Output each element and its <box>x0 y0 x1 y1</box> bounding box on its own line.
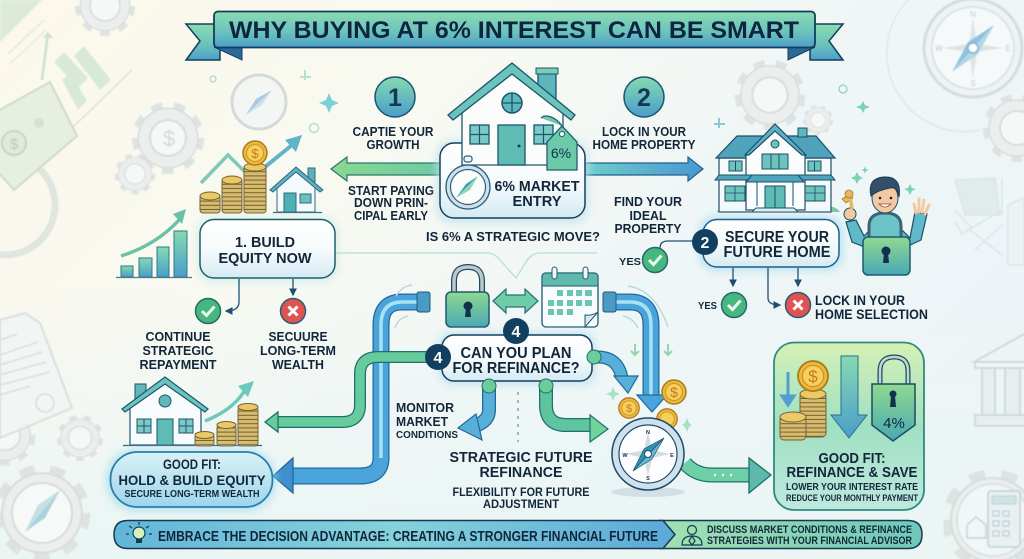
icon: cross right <box>786 292 810 318</box>
icon: light bulb <box>126 522 152 543</box>
panel: 1. build equity now <box>197 217 338 282</box>
icon: 4% padlock <box>872 357 915 441</box>
icon: gold coins near compass <box>606 380 692 432</box>
text: refinance headline <box>786 450 918 504</box>
background decor: top-left finance illustration <box>0 0 132 255</box>
icon: no cross left <box>280 298 306 324</box>
label: capture your growth <box>352 125 434 152</box>
step 1 badge <box>375 77 415 117</box>
label: start paying down principal: DOWN PRIN- <box>354 196 428 210</box>
icon: refinance coins <box>780 361 828 440</box>
label: capture your growth: CAPTIE YOUR <box>352 125 434 139</box>
icon: compass: W <box>622 453 628 459</box>
icon: stopwatch compass <box>446 156 490 209</box>
icon: double arrow <box>493 289 538 313</box>
label: find your ideal property: FIND YOUR <box>614 195 682 209</box>
label: monitor market conditions: CONDITIONS <box>396 429 458 441</box>
label: start paying down principal: START PAYING <box>348 184 434 198</box>
icon: compass <box>611 418 685 497</box>
label: monitor market conditions <box>396 401 458 441</box>
panel: can you plan for refinance: CAN YOU PLAN <box>460 345 572 362</box>
label: strategic future refinance <box>450 449 592 481</box>
badge: 4 left <box>425 344 451 370</box>
label: monitor market conditions: MONITOR <box>396 401 454 415</box>
panel: good fit hold & build equity: SECURE LONG-TERM WEALTH <box>124 489 260 500</box>
panel: secure your future home: SECURE YOUR <box>725 229 829 246</box>
icon: compass: S <box>646 476 650 482</box>
label: lock in your home property: LOCK IN YOUR <box>602 125 686 139</box>
connectors from secure <box>733 268 798 305</box>
icon: 6% price tag: 6% <box>551 145 571 161</box>
panel: good fit refinance & save <box>774 342 924 510</box>
arrow: refinance to coins <box>587 350 638 393</box>
label: find your ideal property: IDEAL <box>630 209 667 223</box>
step 2 badge: 2 <box>637 84 651 112</box>
arrow: monitor market conditions <box>458 379 496 440</box>
footer: advisor segment <box>660 520 922 548</box>
blue pipe down to hold and build equity <box>273 292 430 493</box>
background gear with calculator <box>948 475 1024 559</box>
badge: 2 <box>692 229 718 255</box>
panel: can you plan for refinance <box>438 332 596 385</box>
footer: advisor segment: DISCUSS MARKET CONDITIONS & REFINANCE <box>707 524 912 536</box>
icon: refinance coins: $ <box>808 367 818 386</box>
background gears right <box>739 64 1024 158</box>
icon: person with padlock and key <box>842 166 929 275</box>
badge: 4 left: 4 <box>434 350 443 367</box>
arrow: right to home <box>580 157 703 181</box>
background compass top-right: W <box>935 44 943 53</box>
label: secure long-term wealth: LONG-TERM <box>260 343 336 358</box>
panel: 1. build equity now: EQUITY NOW <box>218 250 312 267</box>
label: secure long-term wealth: SECUURE <box>268 329 328 344</box>
icon: gold coins near compass: $ <box>670 384 678 400</box>
icon: 4% padlock: 4% <box>883 415 905 432</box>
background bank <box>974 333 1024 426</box>
text: refinance headline: LOWER YOUR INTEREST RATE <box>786 481 918 493</box>
background compass top-right: E <box>1005 44 1011 53</box>
background compass top-right: S <box>970 79 976 88</box>
icon: down arrow small <box>782 372 794 405</box>
label: 6% market entry: 6% MARKET <box>494 179 580 195</box>
label: monitor market conditions: MARKET <box>396 415 448 429</box>
question: is 6% a strategic move: IS 6% A STRATEGIC MOVE? <box>426 229 600 244</box>
background decor: top-left finance illustration: $ <box>10 136 19 153</box>
label: 6% market entry: ENTRY <box>512 194 562 210</box>
background gears left <box>0 0 200 556</box>
background document lower-left <box>0 313 72 438</box>
label: find your ideal property <box>614 195 682 236</box>
title banner <box>186 12 843 60</box>
background compass top-right <box>887 0 1022 132</box>
icon: gold coins near compass: $ <box>626 403 632 415</box>
yes check lower: YES <box>698 301 717 312</box>
label: 6% market entry <box>494 179 580 210</box>
text: refinance headline: REFINANCE & SAVE <box>786 464 918 481</box>
yes check upper: YES <box>619 257 641 268</box>
label: start paying down principal: CIPAL EARLY <box>354 209 429 223</box>
label: flexibility for future adjustment: ADJUSTMENT <box>483 497 560 511</box>
icon: yes check left <box>196 298 220 324</box>
badge: 4 top <box>503 318 529 344</box>
dotted connector <box>517 392 519 442</box>
panel: 6% market entry with house <box>436 63 589 224</box>
label: find your ideal property: PROPERTY <box>614 222 682 236</box>
footer: embrace the decision advantage: EMBRACE THE DECISION ADVANTAGE: CREATING A STRONGER FINANCIAL FUTURE <box>158 528 658 545</box>
background compass top-center-left <box>232 75 286 129</box>
label: flexibility for future adjustment <box>452 485 590 511</box>
label: start paying down principal <box>348 184 434 223</box>
yes check lower <box>698 292 746 318</box>
label: strategic future refinance: STRATEGIC FUTURE <box>450 449 592 466</box>
footer: embrace the decision advantage <box>114 520 675 548</box>
panel: secure your future home <box>699 216 843 271</box>
background sparkles <box>210 70 870 132</box>
green pipe compass to refinance card <box>685 458 771 493</box>
footer: advisor segment: STRATEGIES WITH YOUR FINANCIAL ADVISOR <box>707 535 912 547</box>
background gears left: $ <box>163 126 175 151</box>
label: lock in your home selection: LOCK IN YOUR <box>815 293 905 308</box>
icon: 6% price tag <box>541 116 577 170</box>
icon: small house <box>270 167 323 212</box>
icon: coin stacks and trend line: $ <box>251 146 259 161</box>
green pipe to hold and build equity <box>265 357 430 432</box>
label: lock in your home property: HOME PROPERTY <box>592 138 696 152</box>
label: continue strategic repayment: STRATEGIC <box>142 343 214 358</box>
text: refinance headline: GOOD FIT: <box>818 450 886 467</box>
icon: compass: N <box>646 430 650 436</box>
icon: bar chart with growth arrow <box>116 209 192 278</box>
badge: 4 top: 4 <box>512 324 521 341</box>
icon: advisor person <box>682 526 702 545</box>
label: flexibility for future adjustment: FLEXIBILITY FOR FUTURE <box>452 485 590 499</box>
icon: coin stacks and trend line <box>200 135 302 213</box>
icon: big down arrow <box>831 356 867 438</box>
icon: calendar <box>542 267 598 327</box>
label: lock in your home property <box>592 125 696 152</box>
background compass top-right: N <box>970 10 976 19</box>
step 2 badge <box>624 77 664 117</box>
connector from yes to secure <box>660 241 695 248</box>
panel: good fit hold & build equity <box>106 449 276 511</box>
title banner: WHY BUYING AT 6% INTEREST CAN BE SMART <box>229 17 799 44</box>
panel: 1. build equity now: 1. BUILD <box>235 234 295 251</box>
label: continue strategic repayment: REPAYMENT <box>140 357 217 372</box>
label: secure long-term wealth: WEALTH <box>272 357 324 372</box>
panel: good fit hold & build equity: HOLD & BUILD EQUITY <box>118 472 266 488</box>
panel: secure your future home: FUTURE HOME <box>724 244 831 261</box>
arrow: left to equity <box>331 157 445 181</box>
text: refinance headline: REDUCE YOUR MONTHLY PAYMENT <box>786 493 918 504</box>
connector bracket under question <box>335 253 597 278</box>
label: continue strategic repayment: CONTINUE <box>146 329 211 344</box>
icon: house with coins <box>122 377 262 446</box>
label: capture your growth: GROWTH <box>366 138 420 152</box>
panel: can you plan for refinance: FOR REFINANCE? <box>452 360 580 377</box>
label: strategic future refinance: REFINANCE <box>480 464 562 481</box>
icon: compass: E <box>670 453 674 459</box>
label: lock in your home selection: HOME SELECTION <box>815 307 928 322</box>
step 1 badge: 1 <box>388 84 402 112</box>
connectors from build equity <box>226 279 293 311</box>
icon: padlock <box>446 267 489 327</box>
label: lock in your home selection <box>815 293 928 322</box>
blue pipe right into compass <box>395 285 672 412</box>
panel: good fit hold & build equity: GOOD FIT: <box>163 457 221 472</box>
yes check upper <box>619 248 668 272</box>
arrow: strategic future refinance <box>539 379 608 442</box>
badge: 2: 2 <box>701 235 710 252</box>
icon: large house <box>715 124 840 212</box>
label: continue strategic repayment <box>140 329 217 372</box>
background map and house right <box>955 178 1024 265</box>
label: secure long-term wealth <box>260 329 336 372</box>
